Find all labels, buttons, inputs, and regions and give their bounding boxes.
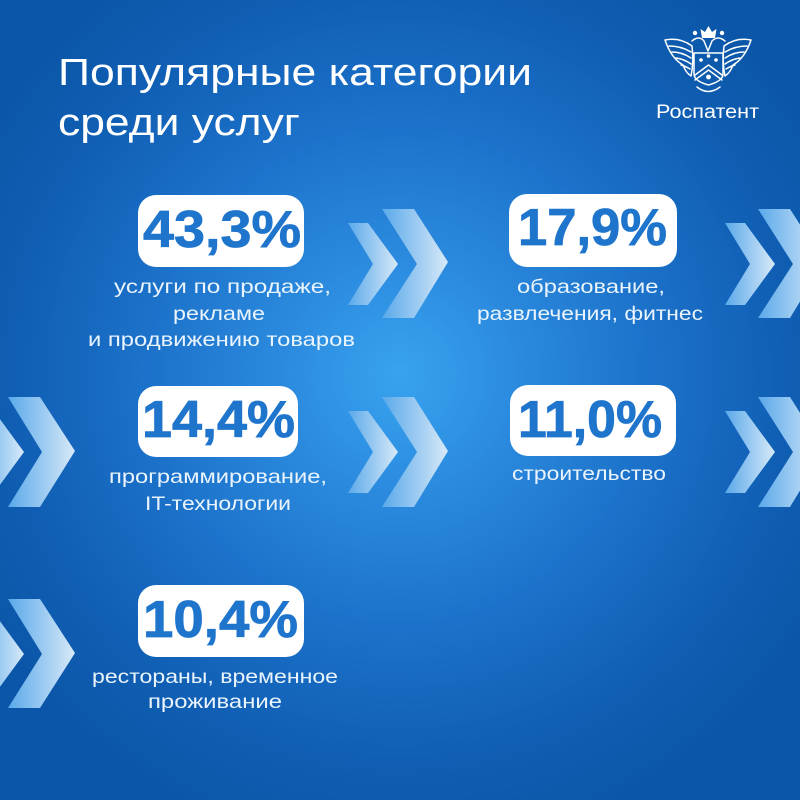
description: развлечения, фитнес bbox=[477, 303, 703, 325]
value: 43,3% bbox=[143, 201, 301, 259]
description: IT-технологии bbox=[145, 493, 291, 515]
value box bbox=[138, 195, 304, 267]
title: Популярные категории bbox=[58, 52, 532, 94]
card: 17,9% bbox=[477, 194, 703, 325]
arrow: row 1 middle bbox=[348, 209, 448, 318]
icon: eagle emblem bbox=[665, 26, 751, 92]
card: 11,0% bbox=[510, 385, 676, 485]
description: услуги по продаже, bbox=[114, 276, 331, 298]
description: рестораны, временное bbox=[92, 666, 338, 688]
card: 14,4% bbox=[109, 386, 327, 515]
value box bbox=[510, 385, 676, 456]
description bbox=[477, 276, 703, 325]
description bbox=[92, 666, 338, 713]
logo: Роспатент bbox=[656, 26, 759, 123]
description: строительство bbox=[512, 463, 666, 485]
description bbox=[88, 276, 355, 351]
title: среди услуг bbox=[58, 102, 300, 144]
description: рекламе bbox=[173, 303, 265, 325]
arrow: row 2 left bbox=[0, 397, 75, 507]
logo wordmark: Роспатент bbox=[656, 102, 759, 123]
arrow: row 2 middle bbox=[348, 397, 448, 507]
arrow: row 1 right bbox=[725, 209, 800, 318]
value box bbox=[509, 194, 677, 267]
arrow: row 3 left bbox=[0, 599, 75, 708]
value: 11,0% bbox=[518, 391, 662, 449]
description: и продвижению товаров bbox=[88, 329, 355, 351]
value: 10,4% bbox=[143, 591, 298, 649]
card: 10,4% bbox=[92, 585, 338, 713]
value: 14,4% bbox=[142, 391, 295, 449]
value box bbox=[138, 585, 304, 657]
description: образование, bbox=[517, 276, 665, 298]
value: 17,9% bbox=[518, 199, 667, 257]
description: проживание bbox=[148, 691, 282, 713]
description: программирование, bbox=[109, 466, 327, 488]
card: 43,3% bbox=[88, 195, 355, 351]
arrow: row 2 right bbox=[725, 397, 800, 507]
value box bbox=[138, 386, 298, 457]
title bbox=[58, 52, 532, 144]
description bbox=[109, 466, 327, 515]
